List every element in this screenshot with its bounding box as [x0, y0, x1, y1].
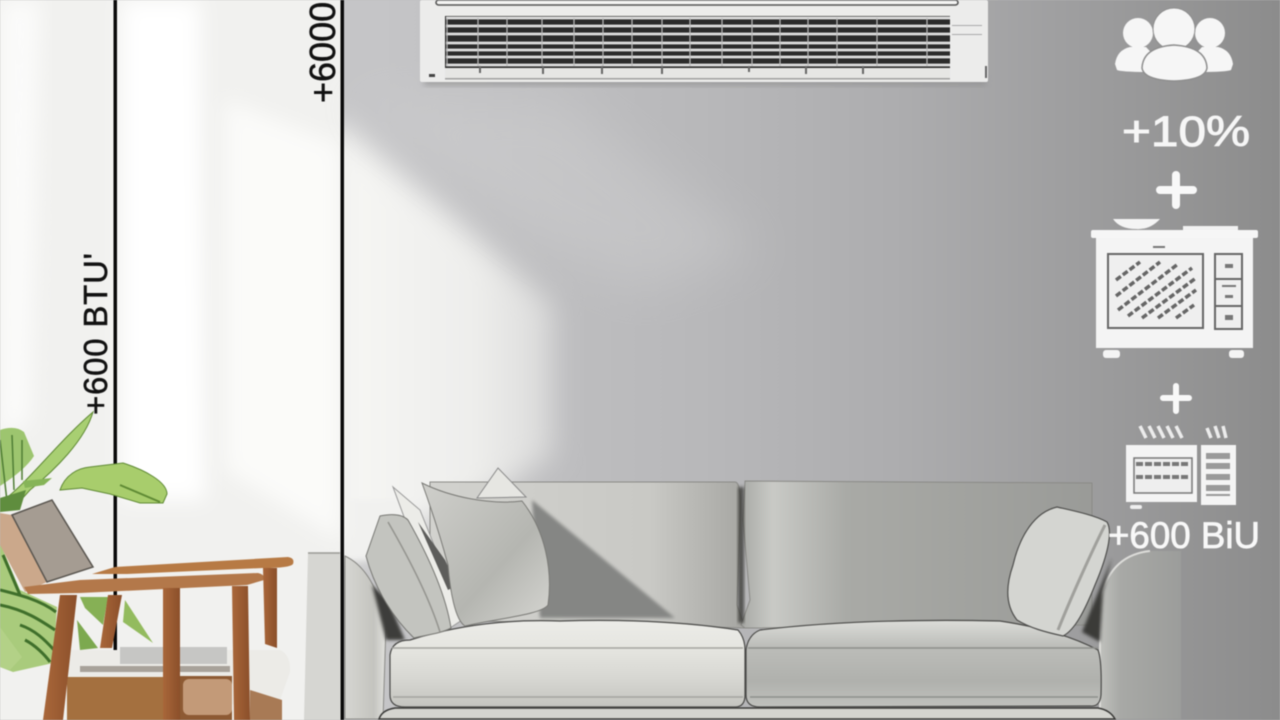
icon: microwave [1091, 219, 1258, 358]
grille [445, 16, 950, 80]
cushion shadow [532, 500, 675, 618]
small left pillow [366, 515, 451, 638]
sofa [304, 468, 1181, 720]
armchair [0, 500, 293, 720]
left side panel [304, 553, 340, 720]
text: +600 BiU: +600 BiU [1108, 515, 1260, 556]
base [379, 708, 1115, 719]
right arm [1100, 551, 1181, 719]
narrow pillow [393, 487, 462, 628]
sofa cavity shadow left [372, 585, 405, 640]
seat cushion right [746, 620, 1101, 707]
rotated label: +600 BTU: +600 BTU' [77, 253, 114, 415]
icon: second plus [1163, 386, 1189, 411]
icon: plus [1160, 175, 1193, 205]
air conditioner unit [420, 0, 988, 86]
icon: people group [1115, 8, 1233, 81]
left arm [345, 556, 386, 719]
sofa cavity shadow right [1082, 558, 1112, 642]
measure line left [114, 0, 117, 720]
seat cushion left [390, 620, 745, 707]
big pillow [422, 483, 549, 626]
back cushion left [430, 482, 745, 628]
measure line right [340, 0, 344, 720]
text: +10%: +10% [1122, 108, 1250, 156]
rotated label: +6000: +6000 [302, 2, 343, 103]
plant [0, 412, 167, 672]
icon: oven and appliance [1126, 426, 1236, 509]
back pillow triangle [477, 468, 526, 498]
right pillow [1008, 507, 1109, 636]
back cushion right [741, 481, 1092, 628]
